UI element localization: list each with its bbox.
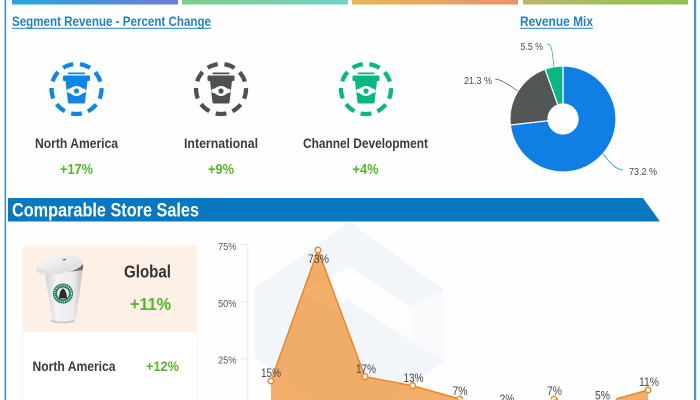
line xyxy=(271,250,648,399)
donut chart: revenue mix: 73.2 % xyxy=(629,167,657,178)
segment: International: +9% xyxy=(208,162,234,178)
segment: International xyxy=(184,59,258,178)
panel: global sales card xyxy=(22,246,198,332)
background watermark logo xyxy=(255,222,444,400)
y axis xyxy=(218,242,248,400)
data points xyxy=(268,247,651,399)
panel: global sales card: +11% xyxy=(130,294,171,314)
segment: Channel Development: Channel Development xyxy=(303,135,428,151)
heading: revenue mix: Revenue Mix xyxy=(520,13,593,29)
data labels: 17% xyxy=(356,364,376,376)
y axis: 25% xyxy=(218,356,237,366)
banner: comparable store sales: Comparable Store Sales xyxy=(12,200,199,222)
data labels: 7% xyxy=(547,386,562,398)
data labels: 73% xyxy=(308,254,329,266)
panel: North America comparable sales: North America xyxy=(32,358,116,374)
data labels: 13% xyxy=(404,373,424,385)
icon: Channel Development coffee cup xyxy=(336,59,396,119)
data labels: 11% xyxy=(639,377,659,389)
area chart: comparable store sales xyxy=(218,242,659,400)
data labels: 15% xyxy=(261,368,281,380)
donut chart: revenue mix: 21.3 % xyxy=(464,76,492,87)
panel: North America comparable sales: +12% xyxy=(146,358,179,374)
data labels xyxy=(261,254,659,400)
top colored bars xyxy=(12,0,688,4)
segment: Channel Development: +4% xyxy=(352,162,379,178)
cup illustration xyxy=(35,252,84,323)
panel: global sales card: Global xyxy=(124,262,171,282)
segment: North America xyxy=(35,59,118,178)
heading: segment revenue: Segment Revenue - Percent Change xyxy=(12,13,211,29)
segment: Channel Development xyxy=(303,59,428,178)
panel: North America comparable sales xyxy=(23,332,197,400)
donut chart: revenue mix: 5.5 % xyxy=(520,42,543,53)
banner: comparable store sales xyxy=(8,198,660,222)
icon: North America coffee cup xyxy=(47,59,106,119)
y axis: 75% xyxy=(218,242,237,253)
segment: North America: +17% xyxy=(60,162,93,178)
icon: International coffee cup xyxy=(191,59,251,119)
donut chart: revenue mix xyxy=(464,42,657,178)
y axis: 50% xyxy=(218,299,237,310)
data labels: 7% xyxy=(452,386,468,398)
cup logo xyxy=(53,284,73,304)
segment: International: International xyxy=(184,135,258,151)
segment: North America: North America xyxy=(35,135,118,151)
filled area xyxy=(271,250,648,400)
